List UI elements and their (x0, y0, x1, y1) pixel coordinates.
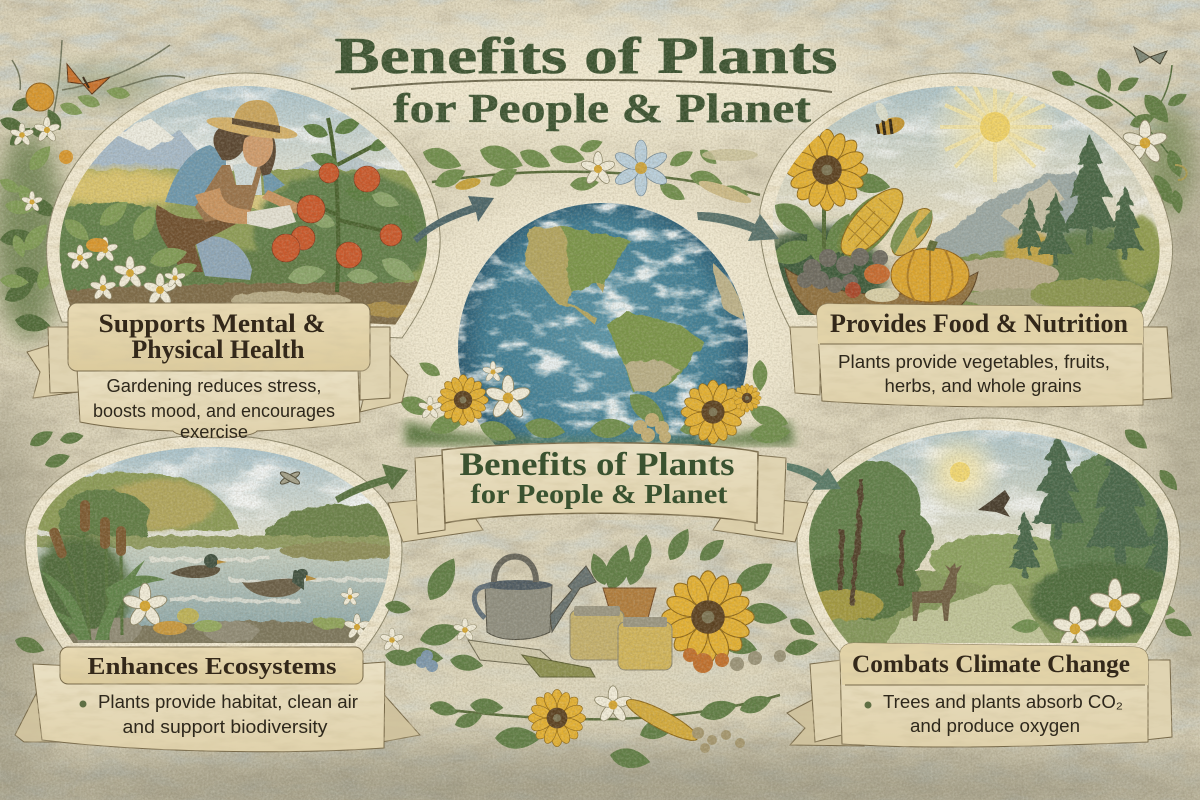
illustration: gardener (156, 100, 300, 280)
banner: centre title (388, 443, 808, 542)
card: supports mental and physical health: Supports Mental & (98, 309, 326, 338)
illustration: harvest basket (785, 240, 978, 332)
icon: blue daisy (613, 140, 669, 196)
panel: ecosystems scene (24, 436, 402, 652)
card: provides food and nutrition: Provides Food & Nutrition (830, 309, 1129, 338)
card: provides food and nutrition: herbs, and whole grains (884, 376, 1082, 396)
arrow: banner to climate (787, 463, 841, 490)
card: supports mental and physical health: boosts mood, and encourages (93, 401, 335, 421)
panel: gardening scene (38, 65, 450, 345)
illustration: deer (912, 563, 962, 621)
icon: bee (873, 101, 907, 138)
card: provides food and nutrition: Plants provide vegetables, fruits, (838, 352, 1110, 372)
card: combats climate change: and produce oxygen (910, 716, 1080, 736)
plants and stones at water edge (122, 583, 371, 640)
continents (525, 226, 743, 392)
card: enhances ecosystems: Enhances Ecosystems (88, 654, 336, 680)
top-left foliage border (0, 40, 185, 340)
ring (25, 435, 402, 655)
title: for People & Planet (393, 85, 811, 131)
bullet (864, 702, 872, 708)
banner: centre title: for People & Planet (470, 479, 728, 509)
bullet (80, 700, 86, 708)
flowers (1011, 579, 1177, 651)
icon: butterfly top left (67, 64, 110, 94)
card: provides food and nutrition (790, 304, 1172, 407)
globe (458, 203, 748, 446)
illustration: watering can and garden still life (380, 525, 789, 677)
icon: dragonfly (279, 470, 301, 486)
ring (47, 73, 440, 338)
illustration: cattails (40, 500, 165, 640)
card: enhances ecosystems: and support biodiversity (122, 717, 328, 737)
banner: centre title: Benefits of Plants (460, 447, 735, 483)
card: combats climate change (787, 643, 1172, 747)
arrow: health to globe (413, 196, 494, 243)
garland under title (420, 136, 760, 207)
panel: food scene (759, 72, 1173, 328)
foliage beside lower circles (12, 425, 1196, 658)
flower arrangement beneath globe (397, 358, 795, 447)
ring (760, 73, 1173, 328)
icon: marigold (26, 83, 54, 111)
title (334, 28, 838, 131)
title: Benefits of Plants (334, 28, 838, 85)
panel: climate scene (790, 410, 1190, 660)
card: enhances ecosystems (15, 647, 420, 752)
icon: bird (978, 490, 1010, 517)
clouds (458, 203, 748, 445)
foreground plants and daisies (60, 202, 197, 302)
card: supports mental and physical health: Gardening reduces stress, (106, 376, 322, 396)
sun (936, 86, 1053, 182)
top-right foliage border (1049, 47, 1192, 215)
card: supports mental and physical health (27, 303, 408, 442)
illustration: ducks (170, 554, 317, 597)
arrow: banner to ecosystems (335, 464, 408, 503)
illustration: bottom garland (428, 686, 780, 772)
card: combats climate change: Trees and plants absorb CO₂ (883, 692, 1123, 712)
card: enhances ecosystems: Plants provide habitat, clean air (98, 692, 358, 712)
arrow: globe to food (697, 212, 779, 241)
icon: butterfly top right (1134, 47, 1167, 64)
sun (922, 432, 997, 507)
ring (797, 418, 1180, 655)
card: supports mental and physical health: exercise (180, 422, 248, 442)
illustration: sunflower and corn (768, 129, 941, 269)
card: combats climate change: Combats Climate Change (852, 651, 1130, 678)
illustration: tomato plant (272, 114, 421, 292)
card: supports mental and physical health: Physical Health (132, 335, 305, 364)
